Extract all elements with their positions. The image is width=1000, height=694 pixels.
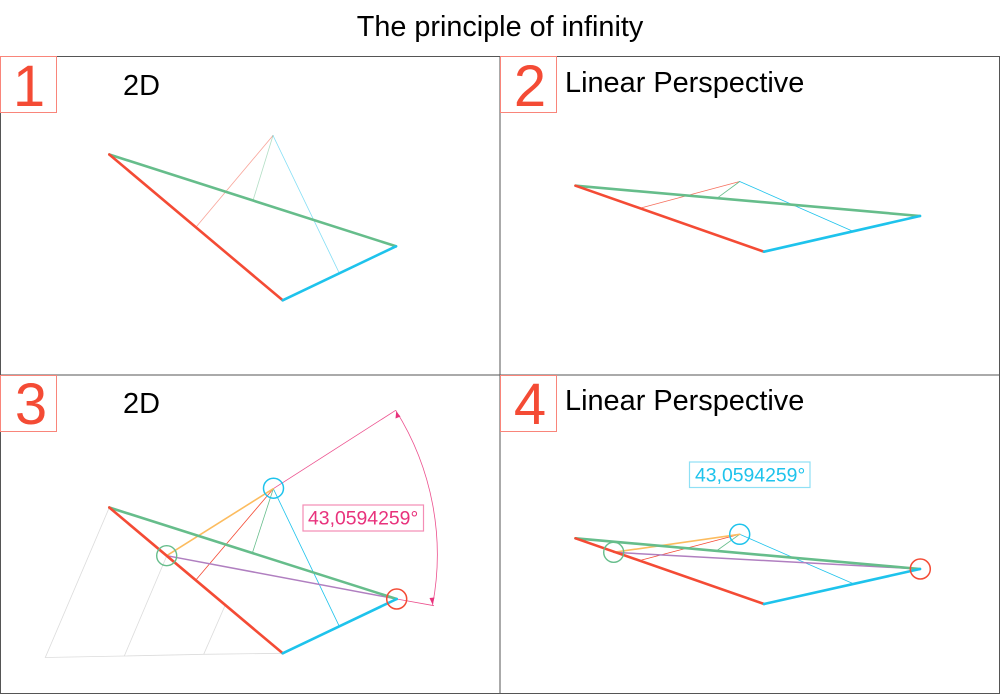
marker: red circle	[910, 559, 930, 579]
marker: blue circle	[730, 524, 750, 544]
badge: 3	[0, 372, 56, 437]
diagram: perspective construction shape	[576, 534, 920, 604]
badge: 1: 1	[13, 54, 45, 119]
panel: 1 2D	[0, 54, 500, 375]
diagram: 2D shape	[109, 136, 396, 300]
badge: 1	[0, 54, 56, 119]
angle measure: pink arc	[273, 410, 437, 606]
diagram: perspective shape	[576, 182, 920, 252]
marker: red circle	[387, 589, 407, 609]
construction lines: grey	[45, 508, 283, 658]
heading: 2D: 2D	[123, 70, 160, 102]
callout: angle value blue: 43,0594259°	[695, 464, 805, 486]
panel: 2 Linear Perspective	[500, 54, 1000, 375]
title: The principle of infinity	[357, 11, 644, 43]
callout: angle value pink: 43,0594259°	[308, 508, 418, 530]
marker: blue circle	[264, 478, 284, 498]
badge: 3: 3	[15, 372, 47, 437]
heading: Linear Perspective: Linear Perspective	[565, 385, 804, 417]
badge: 2	[500, 54, 556, 119]
badge: 4: 4	[514, 372, 546, 437]
marker: green circle	[604, 542, 624, 562]
badge: 4	[500, 372, 556, 437]
panel: 3 2D construction	[0, 372, 500, 694]
heading: Linear Perspective: Linear Perspective	[565, 67, 804, 99]
diagram: construction shape	[109, 489, 397, 653]
marker: green circle	[157, 546, 177, 566]
badge: 2: 2	[514, 54, 546, 119]
heading: 2D: 2D	[123, 388, 160, 420]
panel: 4 perspective construction	[500, 372, 1000, 694]
